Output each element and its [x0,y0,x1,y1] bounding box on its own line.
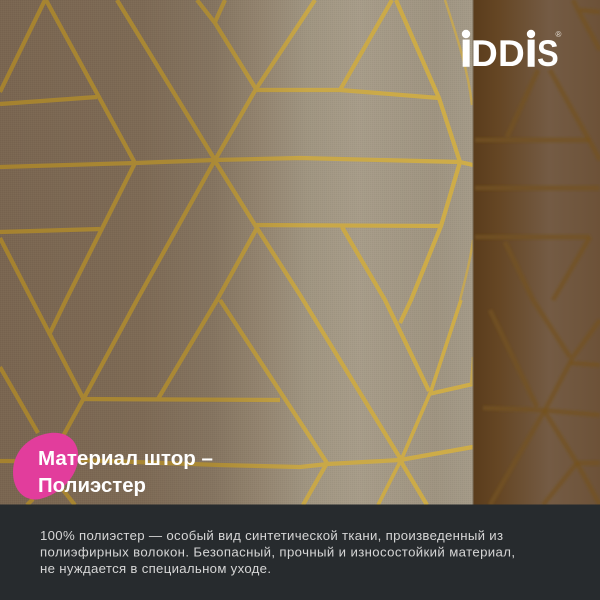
heading: material: Материал штор – [38,447,213,470]
description text: полиэфирных волокон. Безопасный, прочный и износостойкий материал, [40,544,515,560]
description text: 100% полиэстер — особый вид синтетической ткани, произведенный из [40,528,503,543]
gold geometric pattern on front curtain [0,0,473,505]
heading: material [38,447,213,497]
heading: material: Полиэстер [38,474,146,497]
seam between curtains [472,0,474,505]
logo: IDDIS [461,30,562,74]
panel: description band [0,504,600,600]
panel: curtain fabric photo [0,0,473,505]
panel: rear curtain in shadow [473,0,600,505]
muted pattern on rear curtain [475,0,600,505]
logo: IDDIS: S [537,33,559,74]
description text: не нуждается в специальном уходе. [40,561,271,576]
logo: IDDIS: I [461,33,471,74]
description text [40,528,515,576]
logo: IDDIS: I [526,33,536,74]
pink blob accent [13,433,78,499]
logo: IDDIS: DD [471,33,525,74]
logo: IDDIS: ® [556,30,562,39]
